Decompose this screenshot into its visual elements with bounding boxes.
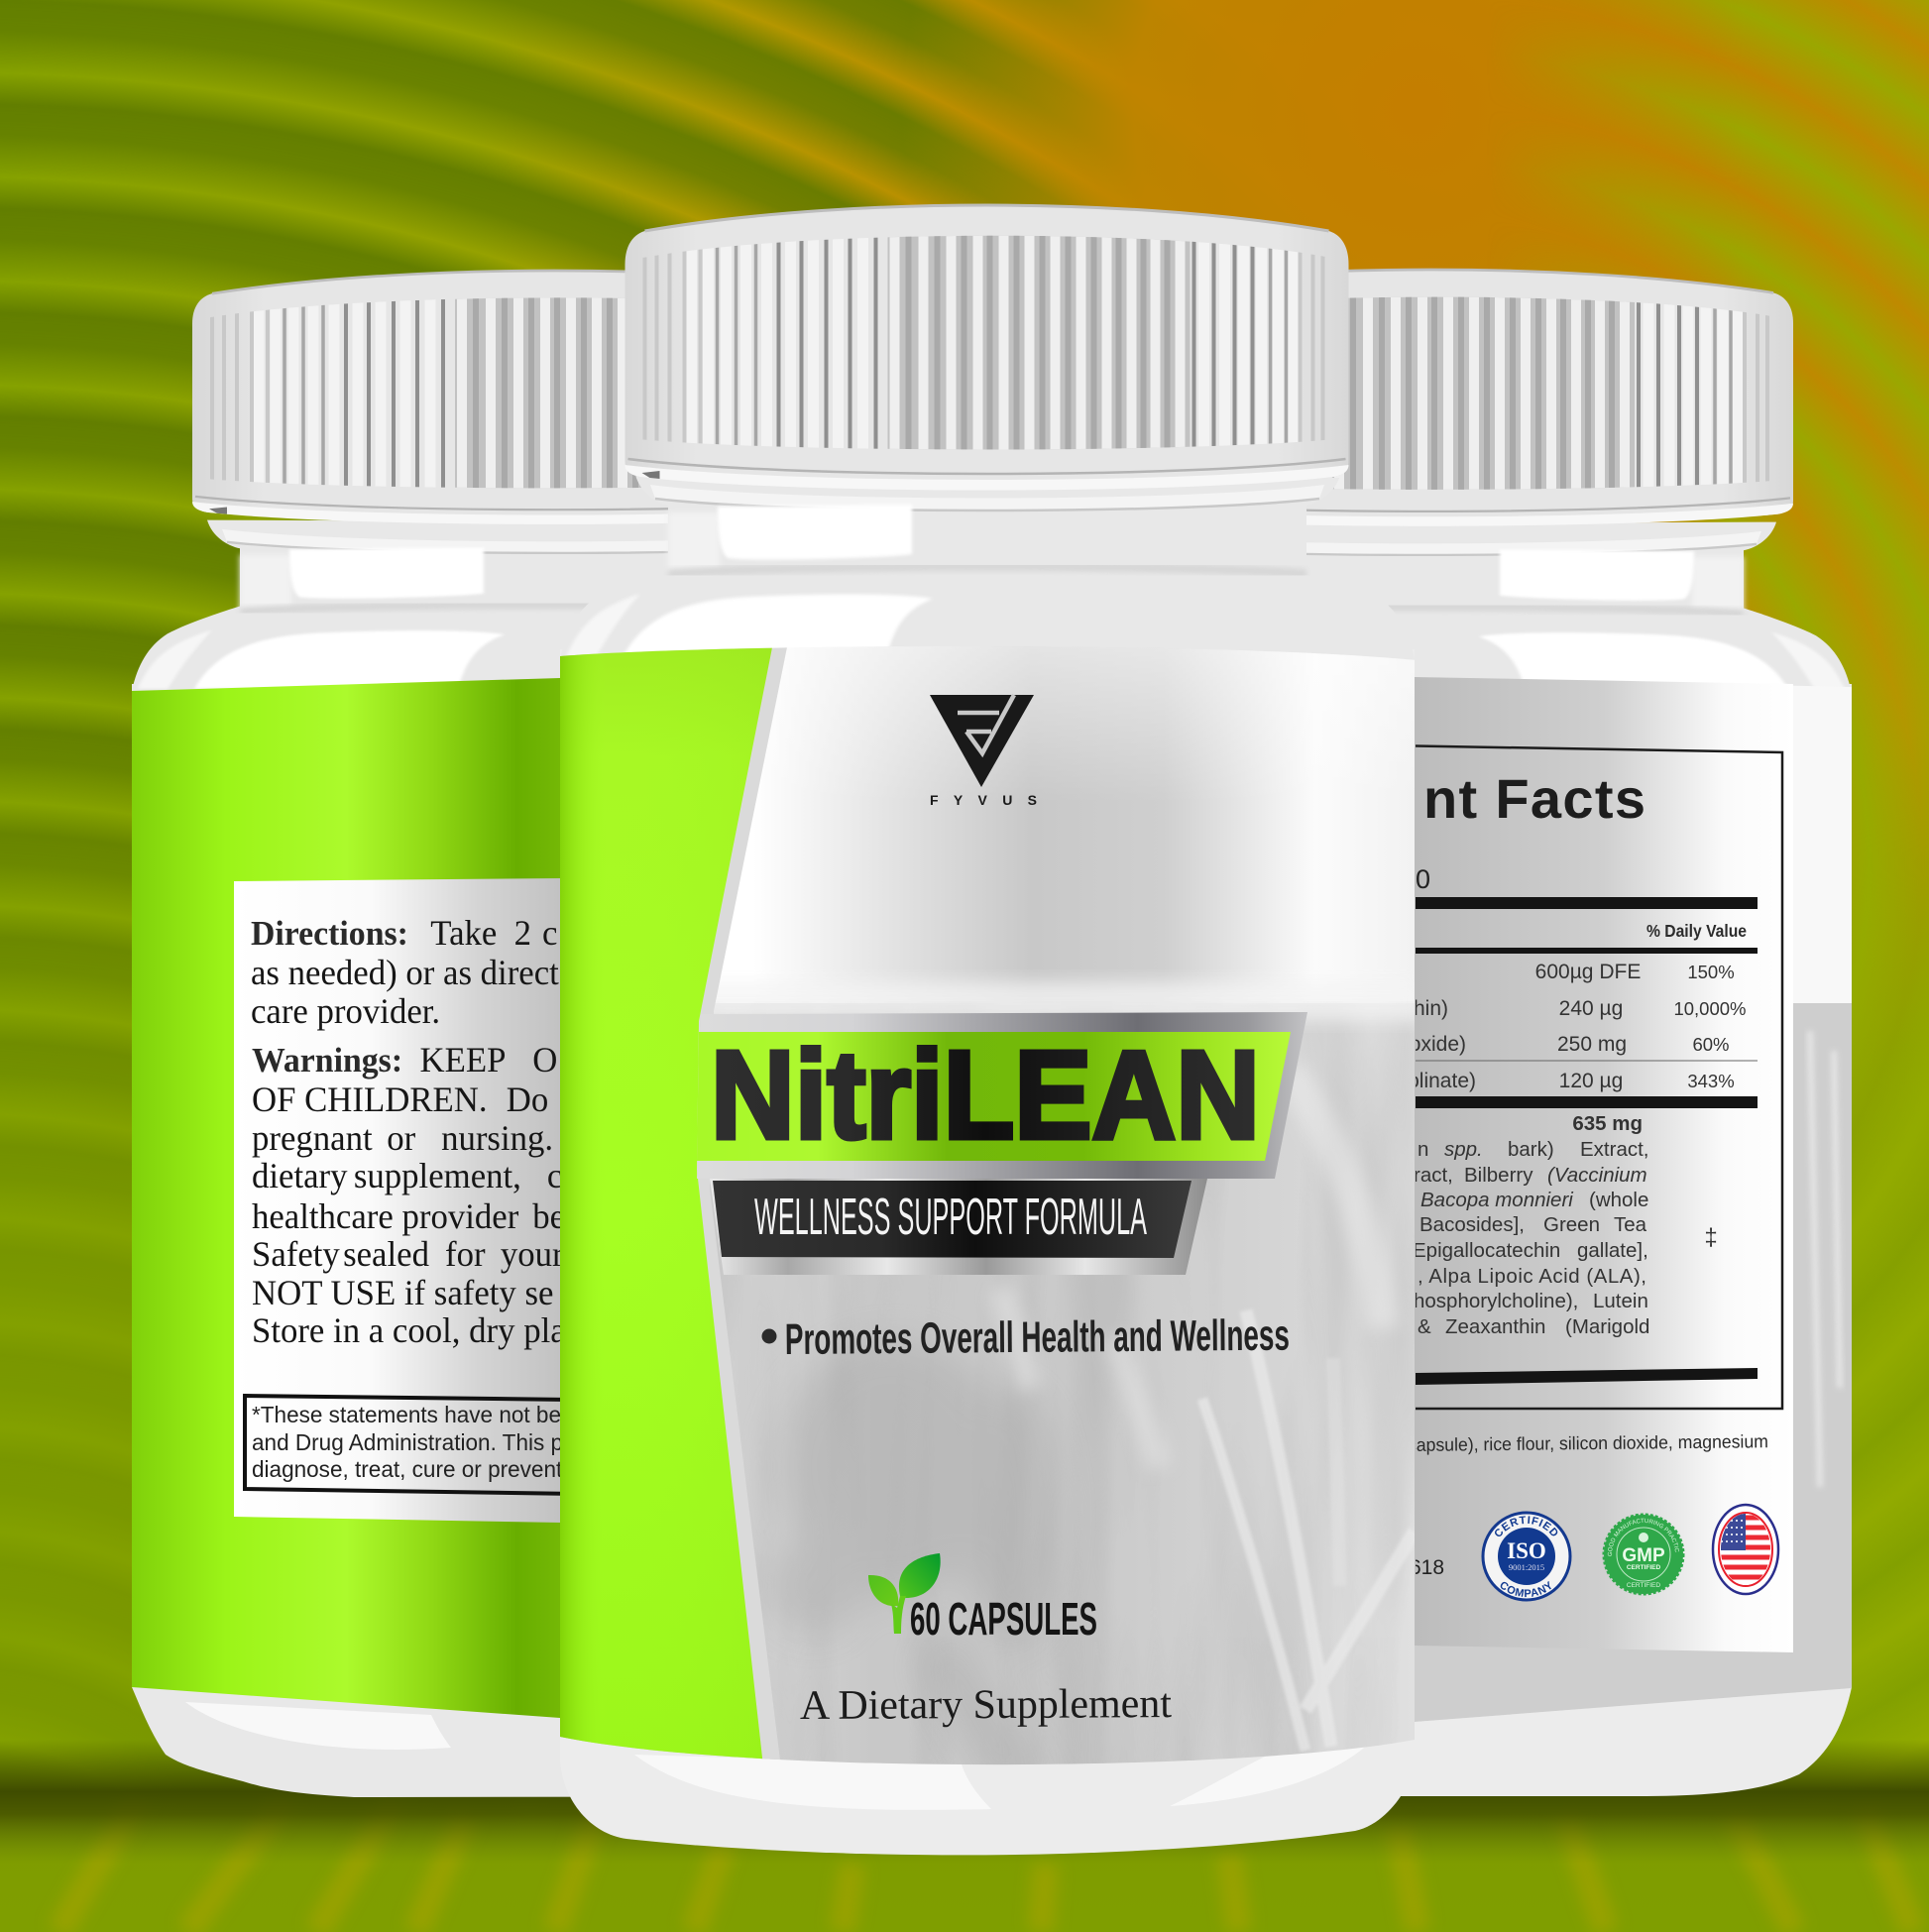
proprietary blend text: Lutein	[1593, 1290, 1648, 1312]
label lower photo section	[560, 1003, 1422, 1786]
directions and warnings text: OF CHILDREN.	[252, 1080, 488, 1119]
nutrient rows: 600µg DFE	[1535, 961, 1641, 983]
directions and warnings text	[251, 914, 566, 1350]
nutrient rows: 343%	[1687, 1071, 1735, 1091]
proprietary blend text: Epigallocatechin	[1413, 1239, 1560, 1262]
directions and warnings text: NOT USE if safety se	[252, 1274, 553, 1312]
product name: NitriLEAN	[711, 1025, 1260, 1165]
daily value heading: % Daily Value	[1646, 921, 1747, 941]
directions and warnings text: Store in a cool, dry pla	[252, 1311, 566, 1350]
badge: ISO certified: 9001:2015	[1509, 1562, 1544, 1572]
icon: green sprout	[868, 1553, 941, 1634]
proprietary blend text	[1413, 1112, 1718, 1338]
badge: ISO certified: CERTIFIED	[1495, 1516, 1558, 1536]
badge: ISO certified: COMPANY	[1501, 1581, 1551, 1598]
directions and warnings text: be	[532, 1197, 565, 1236]
badge: GMP certified: CERTIFIED	[1627, 1564, 1660, 1571]
nutrient rows: 60%	[1692, 1034, 1730, 1055]
directions and warnings text: KEEP	[420, 1041, 506, 1080]
proprietary blend text: Green	[1543, 1213, 1600, 1236]
left bottle cap	[192, 271, 916, 524]
FDA disclaimer box	[245, 1396, 575, 1494]
proprietary blend text: ract,	[1414, 1164, 1453, 1187]
brand logo: FYVUS	[930, 792, 1037, 808]
left bottle: back label with directions	[132, 270, 668, 1797]
proprietary blend text: Tea	[1614, 1213, 1647, 1236]
directions and warnings text: nursing.	[441, 1119, 553, 1158]
left bottle body	[132, 684, 991, 1797]
proprietary blend text: Bilberry	[1464, 1164, 1533, 1187]
badge: USA flag	[1713, 1505, 1778, 1594]
left white directions panel	[234, 878, 561, 1523]
floor with table shadow	[0, 1740, 1929, 1932]
title band	[697, 1012, 1307, 1179]
right label base and photo band	[1415, 677, 1852, 1722]
proprietary blend text: ‡	[1704, 1224, 1718, 1251]
center bottle cap	[624, 205, 1348, 490]
servings digit: 0	[1416, 864, 1430, 894]
proprietary blend text: Zeaxanthin	[1445, 1315, 1545, 1338]
subtitle band	[710, 1179, 1207, 1275]
proprietary blend text: 635 mg	[1572, 1112, 1643, 1135]
green side stripe border	[560, 642, 788, 1784]
directions and warnings text: Directions:	[251, 916, 408, 953]
photo streaks	[1202, 1310, 1415, 1751]
proprietary blend text: hosphorylcholine),	[1414, 1290, 1578, 1312]
directions and warnings text: Warnings:	[252, 1043, 402, 1080]
FDA disclaimer box: and Drug Administration. This p	[252, 1429, 563, 1455]
proprietary blend text: (Vaccinium	[1547, 1164, 1647, 1187]
directions and warnings text: or	[387, 1119, 415, 1158]
proprietary blend text: spp.	[1444, 1138, 1483, 1161]
center bottle neck and shoulder	[560, 475, 1415, 659]
badge: GMP certified: GMP	[1622, 1545, 1665, 1566]
proprietary blend text: Bacosides],	[1419, 1213, 1525, 1236]
nutrient rows: 120 µg	[1559, 1070, 1623, 1092]
proprietary blend text: , Alpa Lipoic Acid (ALA),	[1418, 1265, 1646, 1288]
other ingredients text: capsule), rice flour, silicon dioxide, magnesium	[1408, 1430, 1768, 1455]
left bottle neck and shoulder	[132, 520, 986, 691]
right bottle body	[991, 684, 1852, 1796]
green side stripe	[560, 642, 773, 1784]
center bottle body	[560, 649, 1415, 1855]
proprietary blend text: (whole	[1589, 1189, 1648, 1211]
badge: GMP certified: CERTIFIED	[1627, 1582, 1660, 1589]
directions and warnings text: dietary	[252, 1157, 348, 1195]
directions and warnings text: O	[532, 1041, 557, 1080]
nutrient rows: oxide)	[1410, 1033, 1466, 1056]
directions and warnings text: Do	[507, 1080, 548, 1119]
badge: GMP certified	[1602, 1513, 1685, 1596]
supplement facts box	[1388, 745, 1782, 1579]
proprietary blend text: Extract,	[1580, 1138, 1649, 1161]
directions and warnings text: Safety	[252, 1235, 340, 1274]
benefit bullet: Promotes Overall Health and Wellness	[785, 1311, 1290, 1364]
photo dark patches	[763, 1338, 1061, 1784]
nutrient rows: olinate)	[1408, 1070, 1476, 1092]
dietary supplement line: A Dietary Supplement	[800, 1681, 1172, 1729]
nutrient rows: 10,000%	[1673, 998, 1747, 1019]
directions and warnings text: sealed	[343, 1235, 429, 1274]
nutrient rows: 240 µg	[1559, 997, 1623, 1020]
proprietary blend text: Bacopa monnieri	[1420, 1189, 1574, 1211]
directions and warnings text: care provider.	[251, 992, 440, 1031]
proprietary blend text: (Marigold	[1565, 1315, 1649, 1338]
center bottle base highlights	[634, 1740, 1373, 1810]
directions and warnings text: healthcare provider	[252, 1197, 519, 1236]
proprietary blend text: &	[1418, 1315, 1431, 1338]
proprietary blend text: n	[1418, 1138, 1428, 1161]
benefit bullet	[761, 1311, 1290, 1364]
directions and warnings text: 2	[514, 914, 531, 953]
badge: ISO certified	[1481, 1511, 1572, 1602]
right bottle neck and shoulder	[997, 522, 1852, 693]
proprietary blend text: gallate],	[1577, 1239, 1648, 1262]
capsule count: 60 CAPSULES	[910, 1593, 1097, 1645]
FDA disclaimer box: *These statements have not bee	[252, 1402, 574, 1427]
left bottle base highlight	[185, 1702, 451, 1750]
badge: GMP certified: GOOD MANUFACTURING PRACTICE	[1608, 1519, 1679, 1556]
right bottle: supplement facts label	[1306, 268, 1852, 1796]
FDA disclaimer box: diagnose, treat, cure or prevent	[252, 1456, 563, 1482]
nutrient rows: hin)	[1414, 997, 1448, 1020]
directions and warnings text: your	[501, 1235, 564, 1274]
directions and warnings text: supplement,	[354, 1157, 521, 1195]
right bottle cap	[1070, 270, 1793, 526]
directions and warnings text: c	[542, 914, 557, 953]
heading: nt Facts	[1423, 767, 1645, 830]
center label	[560, 634, 1422, 1786]
nutrient rows	[1408, 961, 1747, 1092]
brand logo	[930, 695, 1037, 808]
directions and warnings text: pregnant	[252, 1119, 373, 1158]
badge: ISO certified: ISO	[1507, 1538, 1546, 1563]
proprietary blend text: bark)	[1508, 1138, 1554, 1161]
center bottle: front label	[560, 205, 1422, 1855]
directions and warnings text: for	[445, 1235, 486, 1274]
directions and warnings text: c	[547, 1157, 562, 1195]
left bottle green label	[132, 678, 560, 1718]
subtitle band: WELLNESS SUPPORT FORMULA	[754, 1189, 1147, 1246]
label upper white section	[560, 634, 1422, 1016]
lot number fragment: 618	[1410, 1556, 1444, 1579]
directions and warnings text: Take	[430, 914, 497, 953]
right white panel	[1415, 677, 1793, 1652]
directions and warnings text: as needed) or as direct	[251, 954, 559, 992]
nutrient rows: 150%	[1687, 962, 1735, 982]
nutrient rows: 250 mg	[1557, 1033, 1627, 1056]
rules	[1416, 897, 1758, 1385]
